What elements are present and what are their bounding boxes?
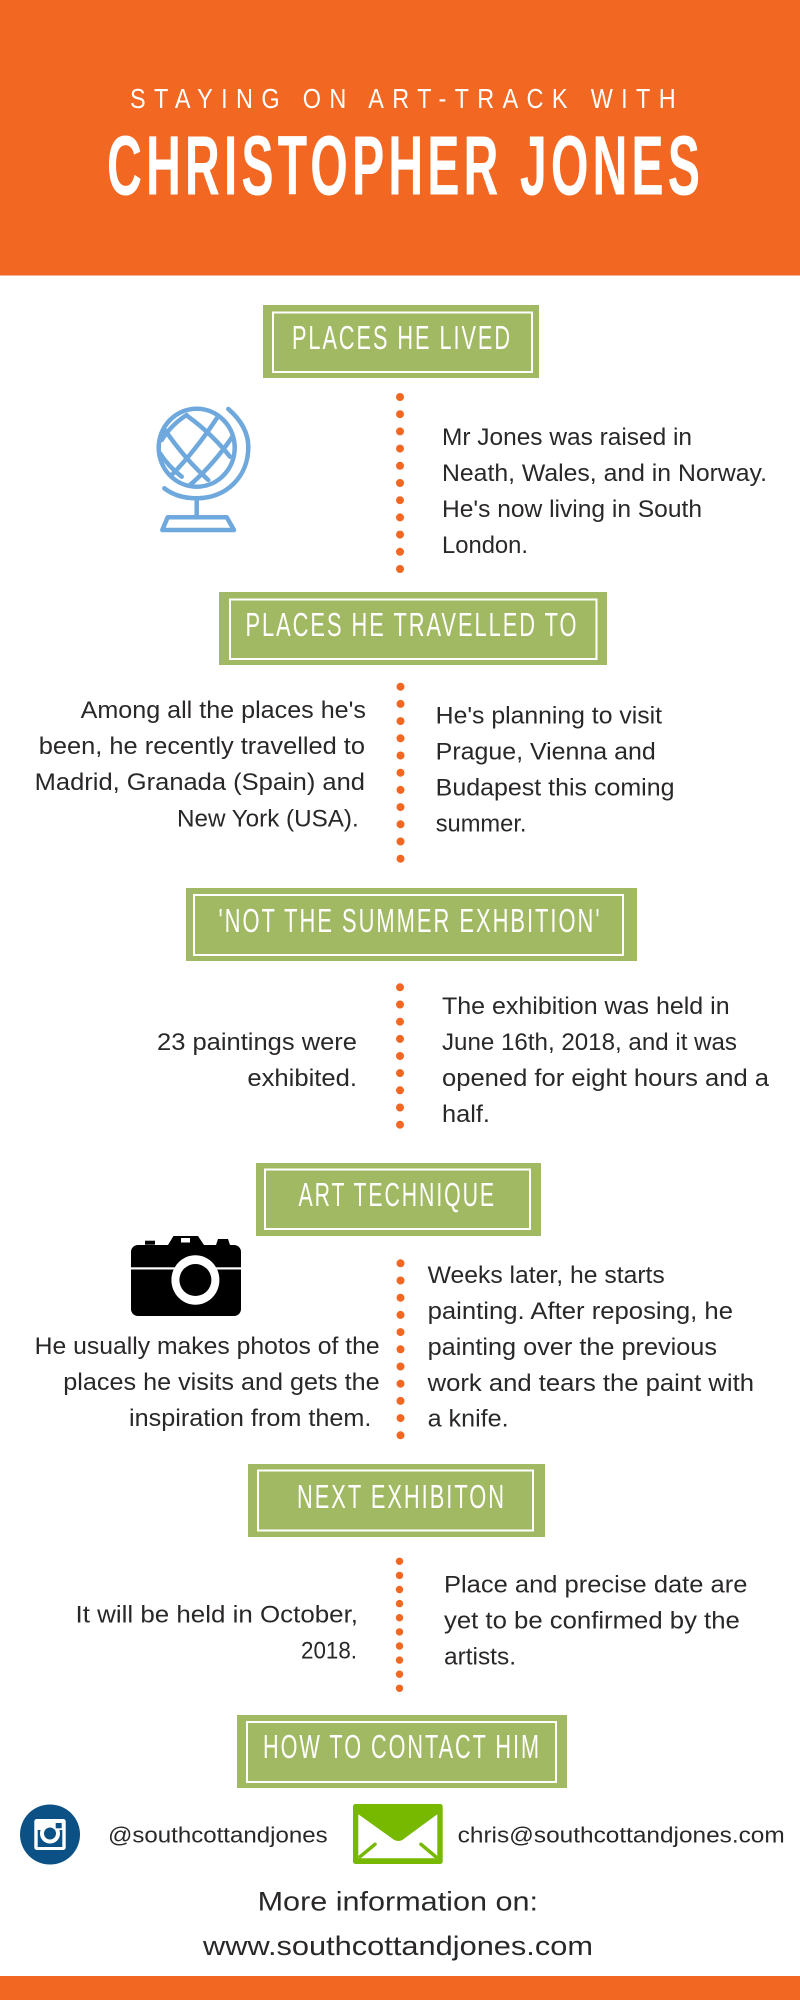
text: painting process: work and tears the paint with (427, 1370, 754, 1397)
text: where he lived: Neath, Wales, and in Norway. (442, 460, 767, 487)
panel: places he travelled to (35, 592, 674, 863)
timeline dots (396, 1259, 404, 1439)
text: travel plans: Prague, Vienna and (436, 738, 656, 766)
heading: places he lived: PLACES HE LIVED (292, 319, 512, 356)
timeline dots (396, 1558, 403, 1692)
text: exhibition date: June 16th, 2018, and it was (442, 1029, 737, 1056)
timeline dots (396, 983, 404, 1129)
text: where he lived (442, 424, 767, 559)
text: travel plans (436, 702, 674, 838)
text: date of next exhibition: It will be held in October, (76, 1601, 358, 1628)
icon: globe (159, 409, 248, 530)
text: painting process: Weeks later, he starts (428, 1262, 665, 1289)
text: recent travels (35, 697, 366, 832)
footer band (0, 1976, 800, 2000)
text: date of next exhibition: 2018. (301, 1638, 357, 1664)
panel: places he lived (159, 305, 767, 573)
text: where he lived: London. (442, 532, 528, 559)
text: recent travels: Among all the places he's (81, 697, 366, 724)
text: website: www.southcottandjones.com (202, 1931, 593, 1961)
text: details to be confirmed: artists. (444, 1644, 516, 1671)
heading: art technique (256, 1163, 541, 1236)
text: painting process: a knife. (428, 1406, 509, 1432)
text: paintings count: 23 paintings were (157, 1029, 357, 1056)
heading: art technique: ART TECHNIQUE (298, 1176, 496, 1213)
text: recent travels: New York (USA). (177, 806, 359, 832)
text: where he lived: Mr Jones was raised in (442, 424, 692, 451)
text: painting process (427, 1262, 754, 1432)
panel: how to contact him (20, 1715, 785, 1961)
heading: places he travelled to: PLACES HE TRAVELLED TO (246, 606, 578, 643)
heading: places he travelled to (219, 592, 607, 665)
heading: not the summer exhibition (186, 888, 637, 961)
text: paintings count: exhibited. (247, 1065, 357, 1092)
heading: places he lived (263, 305, 539, 378)
text: photos as inspiration: places he visits and gets the (63, 1369, 380, 1396)
text: more information label: More information on: (258, 1887, 538, 1917)
text: travel plans: Budapest this coming (436, 774, 674, 802)
text: details to be confirmed: Place and precise date are (444, 1572, 747, 1599)
text: exhibition date (442, 993, 770, 1128)
heading: next exhibition: NEXT EXHIBITON (297, 1478, 506, 1515)
text: date of next exhibition (76, 1601, 358, 1664)
text: where he lived: He's now living in South (442, 496, 702, 523)
text: exhibition date: The exhibition was held in (442, 993, 730, 1020)
text: instagram handle: @southcottandjones (108, 1823, 328, 1848)
heading: how to contact him (237, 1715, 567, 1788)
text: travel plans: summer. (436, 810, 526, 838)
panel: next exhibition (76, 1464, 747, 1692)
icon: instagram (20, 1804, 80, 1864)
text: painting process: painting over the previous (428, 1334, 717, 1361)
timeline dots (396, 393, 404, 573)
text: travel plans: He's planning to visit (436, 702, 662, 730)
text: exhibition date: half. (442, 1101, 490, 1128)
text: exhibition date: opened for eight hours and a (442, 1065, 770, 1092)
text: recent travels: been, he recently travelled to (39, 733, 365, 760)
text: photos as inspiration: He usually makes photos of the (35, 1333, 380, 1360)
timeline dots (396, 683, 404, 863)
icon: camera (131, 1236, 241, 1316)
heading: next exhibition (248, 1464, 545, 1537)
text: paintings count (157, 1029, 357, 1092)
text: details to be confirmed: yet to be confirmed by the (444, 1608, 740, 1635)
text: photos as inspiration: inspiration from them. (129, 1405, 371, 1432)
text: details to be confirmed (444, 1572, 747, 1671)
text: recent travels: Madrid, Granada (Spain) and (35, 769, 365, 796)
header band (0, 0, 800, 276)
subtitle: STAYING ON ART-TRACK WITH (130, 83, 684, 114)
heading: not the summer exhibition: 'NOT THE SUMMER EXHBITION' (218, 902, 602, 939)
text: painting process: painting. After reposing, he (428, 1298, 733, 1325)
text: email address: chris@southcottandjones.com (458, 1823, 785, 1848)
panel: art technique (35, 1163, 754, 1439)
panel: not the summer exhibition (157, 888, 770, 1129)
heading: how to contact him: HOW TO CONTACT HIM (263, 1728, 541, 1765)
icon: email envelope (353, 1804, 443, 1864)
text: photos as inspiration (35, 1333, 380, 1432)
